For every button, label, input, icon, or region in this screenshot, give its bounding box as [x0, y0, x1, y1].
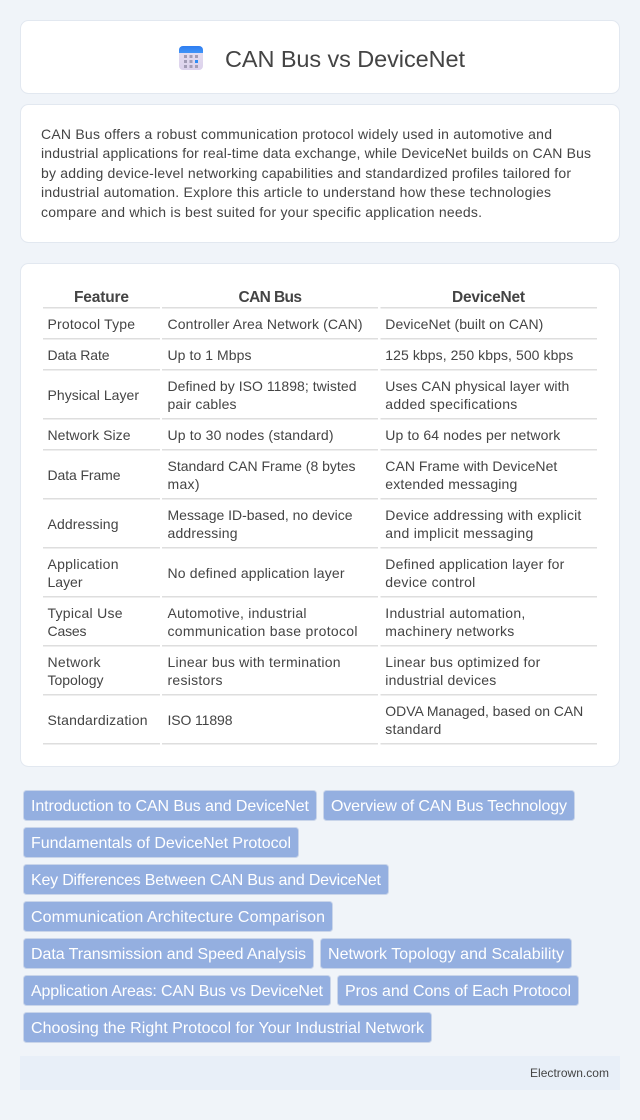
- tag: Key Differences Between CAN Bus and DeviceNet: [31, 872, 382, 889]
- footer: Electrown.com: [530, 1066, 609, 1080]
- tag: Data Transmission and Speed Analysis: [31, 946, 306, 963]
- tag: [338, 976, 578, 1006]
- row: standardization: [43, 703, 597, 744]
- row: network size: Network Size: [48, 427, 131, 443]
- tag: Introduction to CAN Bus and DeviceNet: [31, 798, 310, 815]
- row: data rate: [43, 347, 597, 370]
- row: typical use cases: Industrial automation,: [385, 605, 525, 621]
- text block: intro paragraph: [41, 126, 591, 220]
- row: protocol type: Controller Area Network (CAN): [168, 316, 362, 332]
- panel: comparison table: [20, 264, 620, 766]
- title: CAN Bus vs DeviceNet: [225, 46, 465, 72]
- row: typical use cases: machinery networks: [385, 623, 514, 639]
- row: application layer: Layer: [48, 574, 83, 590]
- row: addressing: addressing: [168, 525, 238, 541]
- row: physical layer: pair cables: [168, 396, 236, 412]
- row: network topology: [43, 654, 597, 696]
- row: data rate: Data Rate: [48, 347, 110, 363]
- row: application layer: [43, 556, 597, 598]
- icon: calendar: [179, 46, 203, 70]
- row: addressing: [43, 507, 597, 548]
- text block: intro paragraph: compare and which is best suited for your specific application needs.: [41, 204, 482, 220]
- text block: intro paragraph: industrial applications for real-time data exchange, while DeviceNet builds on CAN Bus: [41, 145, 591, 161]
- tag: Application Areas: CAN Bus vs DeviceNet: [31, 983, 324, 1000]
- row: typical use cases: communication base protocol: [168, 623, 358, 639]
- row: physical layer: [43, 378, 597, 420]
- row: network topology: resistors: [168, 672, 222, 688]
- row: data rate: 125 kbps, 250 kbps, 500 kbps: [385, 347, 573, 363]
- row: network topology: Linear bus optimized for: [385, 654, 541, 670]
- row: data frame: [43, 458, 597, 500]
- tag: [24, 828, 298, 858]
- tag: [320, 938, 572, 968]
- tag: Choosing the Right Protocol for Your Industrial Network: [31, 1020, 425, 1037]
- row: physical layer: Defined by ISO 11898; twisted: [168, 378, 356, 394]
- table header row: Feature: [74, 289, 129, 306]
- row: standardization: ODVA Managed, based on CAN: [385, 703, 583, 719]
- tag: [24, 976, 330, 1006]
- row: addressing: and implicit messaging: [385, 525, 533, 541]
- row: network size: [43, 427, 597, 450]
- tag: [324, 790, 574, 820]
- row: network topology: Network: [48, 654, 102, 670]
- table header row: CAN Bus: [238, 289, 302, 306]
- row: application layer: Defined application layer for: [385, 556, 565, 572]
- text block: intro paragraph: industrial automation. Explore this article to understand how these technologies: [41, 184, 551, 200]
- row: network topology: Linear bus with termination: [168, 654, 340, 670]
- footer: [20, 1056, 620, 1090]
- row: network topology: industrial devices: [385, 672, 496, 688]
- row: typical use cases: Typical Use: [48, 605, 123, 621]
- panel: introduction: [20, 104, 620, 242]
- row: data frame: Standard CAN Frame (8 bytes: [168, 458, 356, 474]
- row: protocol type: Protocol Type: [48, 316, 135, 332]
- row: application layer: Application: [48, 556, 118, 572]
- tag: Network Topology and Scalability: [328, 946, 564, 963]
- row: network topology: Topology: [48, 672, 104, 688]
- row: application layer: No defined application layer: [168, 565, 345, 581]
- tag: [24, 790, 316, 820]
- row: addressing: Message ID-based, no device: [168, 507, 353, 523]
- row: data frame: Data Frame: [48, 467, 121, 483]
- row: data frame: CAN Frame with DeviceNet: [385, 458, 557, 474]
- tag: Communication Architecture Comparison: [31, 909, 325, 926]
- panel: title header: [20, 20, 620, 94]
- tag: Fundamentals of DeviceNet Protocol: [31, 835, 291, 852]
- text block: intro paragraph: by adding device-level networking capabilities and standardized profiles tailored for: [41, 165, 571, 181]
- row: physical layer: Physical Layer: [48, 387, 139, 403]
- row: standardization: ISO 11898: [168, 712, 233, 728]
- row: protocol type: [43, 316, 597, 340]
- row: application layer: device control: [385, 574, 475, 590]
- tag: Overview of CAN Bus Technology: [331, 798, 567, 815]
- row: network size: Up to 30 nodes (standard): [168, 427, 334, 443]
- row: protocol type: DeviceNet (built on CAN): [385, 316, 543, 332]
- row: standardization: Standardization: [48, 712, 148, 728]
- row: data frame: extended messaging: [385, 476, 517, 492]
- row: typical use cases: [43, 605, 597, 646]
- row: data frame: max): [168, 476, 200, 492]
- tag: [24, 902, 332, 932]
- row: data rate: Up to 1 Mbps: [168, 347, 252, 363]
- row: addressing: Device addressing with explicit: [385, 507, 581, 523]
- panel: topic tags: [24, 790, 578, 1042]
- tag: [24, 1012, 432, 1042]
- row: typical use cases: Automotive, industrial: [168, 605, 306, 621]
- text block: intro paragraph: CAN Bus offers a robust communication protocol widely used in automotive and: [41, 126, 552, 142]
- row: addressing: Addressing: [48, 516, 118, 532]
- table header row: [43, 289, 597, 308]
- table header row: DeviceNet: [452, 289, 525, 306]
- row: standardization: standard: [385, 721, 441, 737]
- tag: [24, 938, 314, 968]
- tag: [24, 864, 388, 894]
- row: physical layer: Uses CAN physical layer with: [385, 378, 569, 394]
- row: physical layer: added specifications: [385, 396, 517, 412]
- row: typical use cases: Cases: [48, 623, 86, 639]
- tag: Pros and Cons of Each Protocol: [345, 983, 571, 1000]
- row: network size: Up to 64 nodes per network: [385, 427, 561, 443]
